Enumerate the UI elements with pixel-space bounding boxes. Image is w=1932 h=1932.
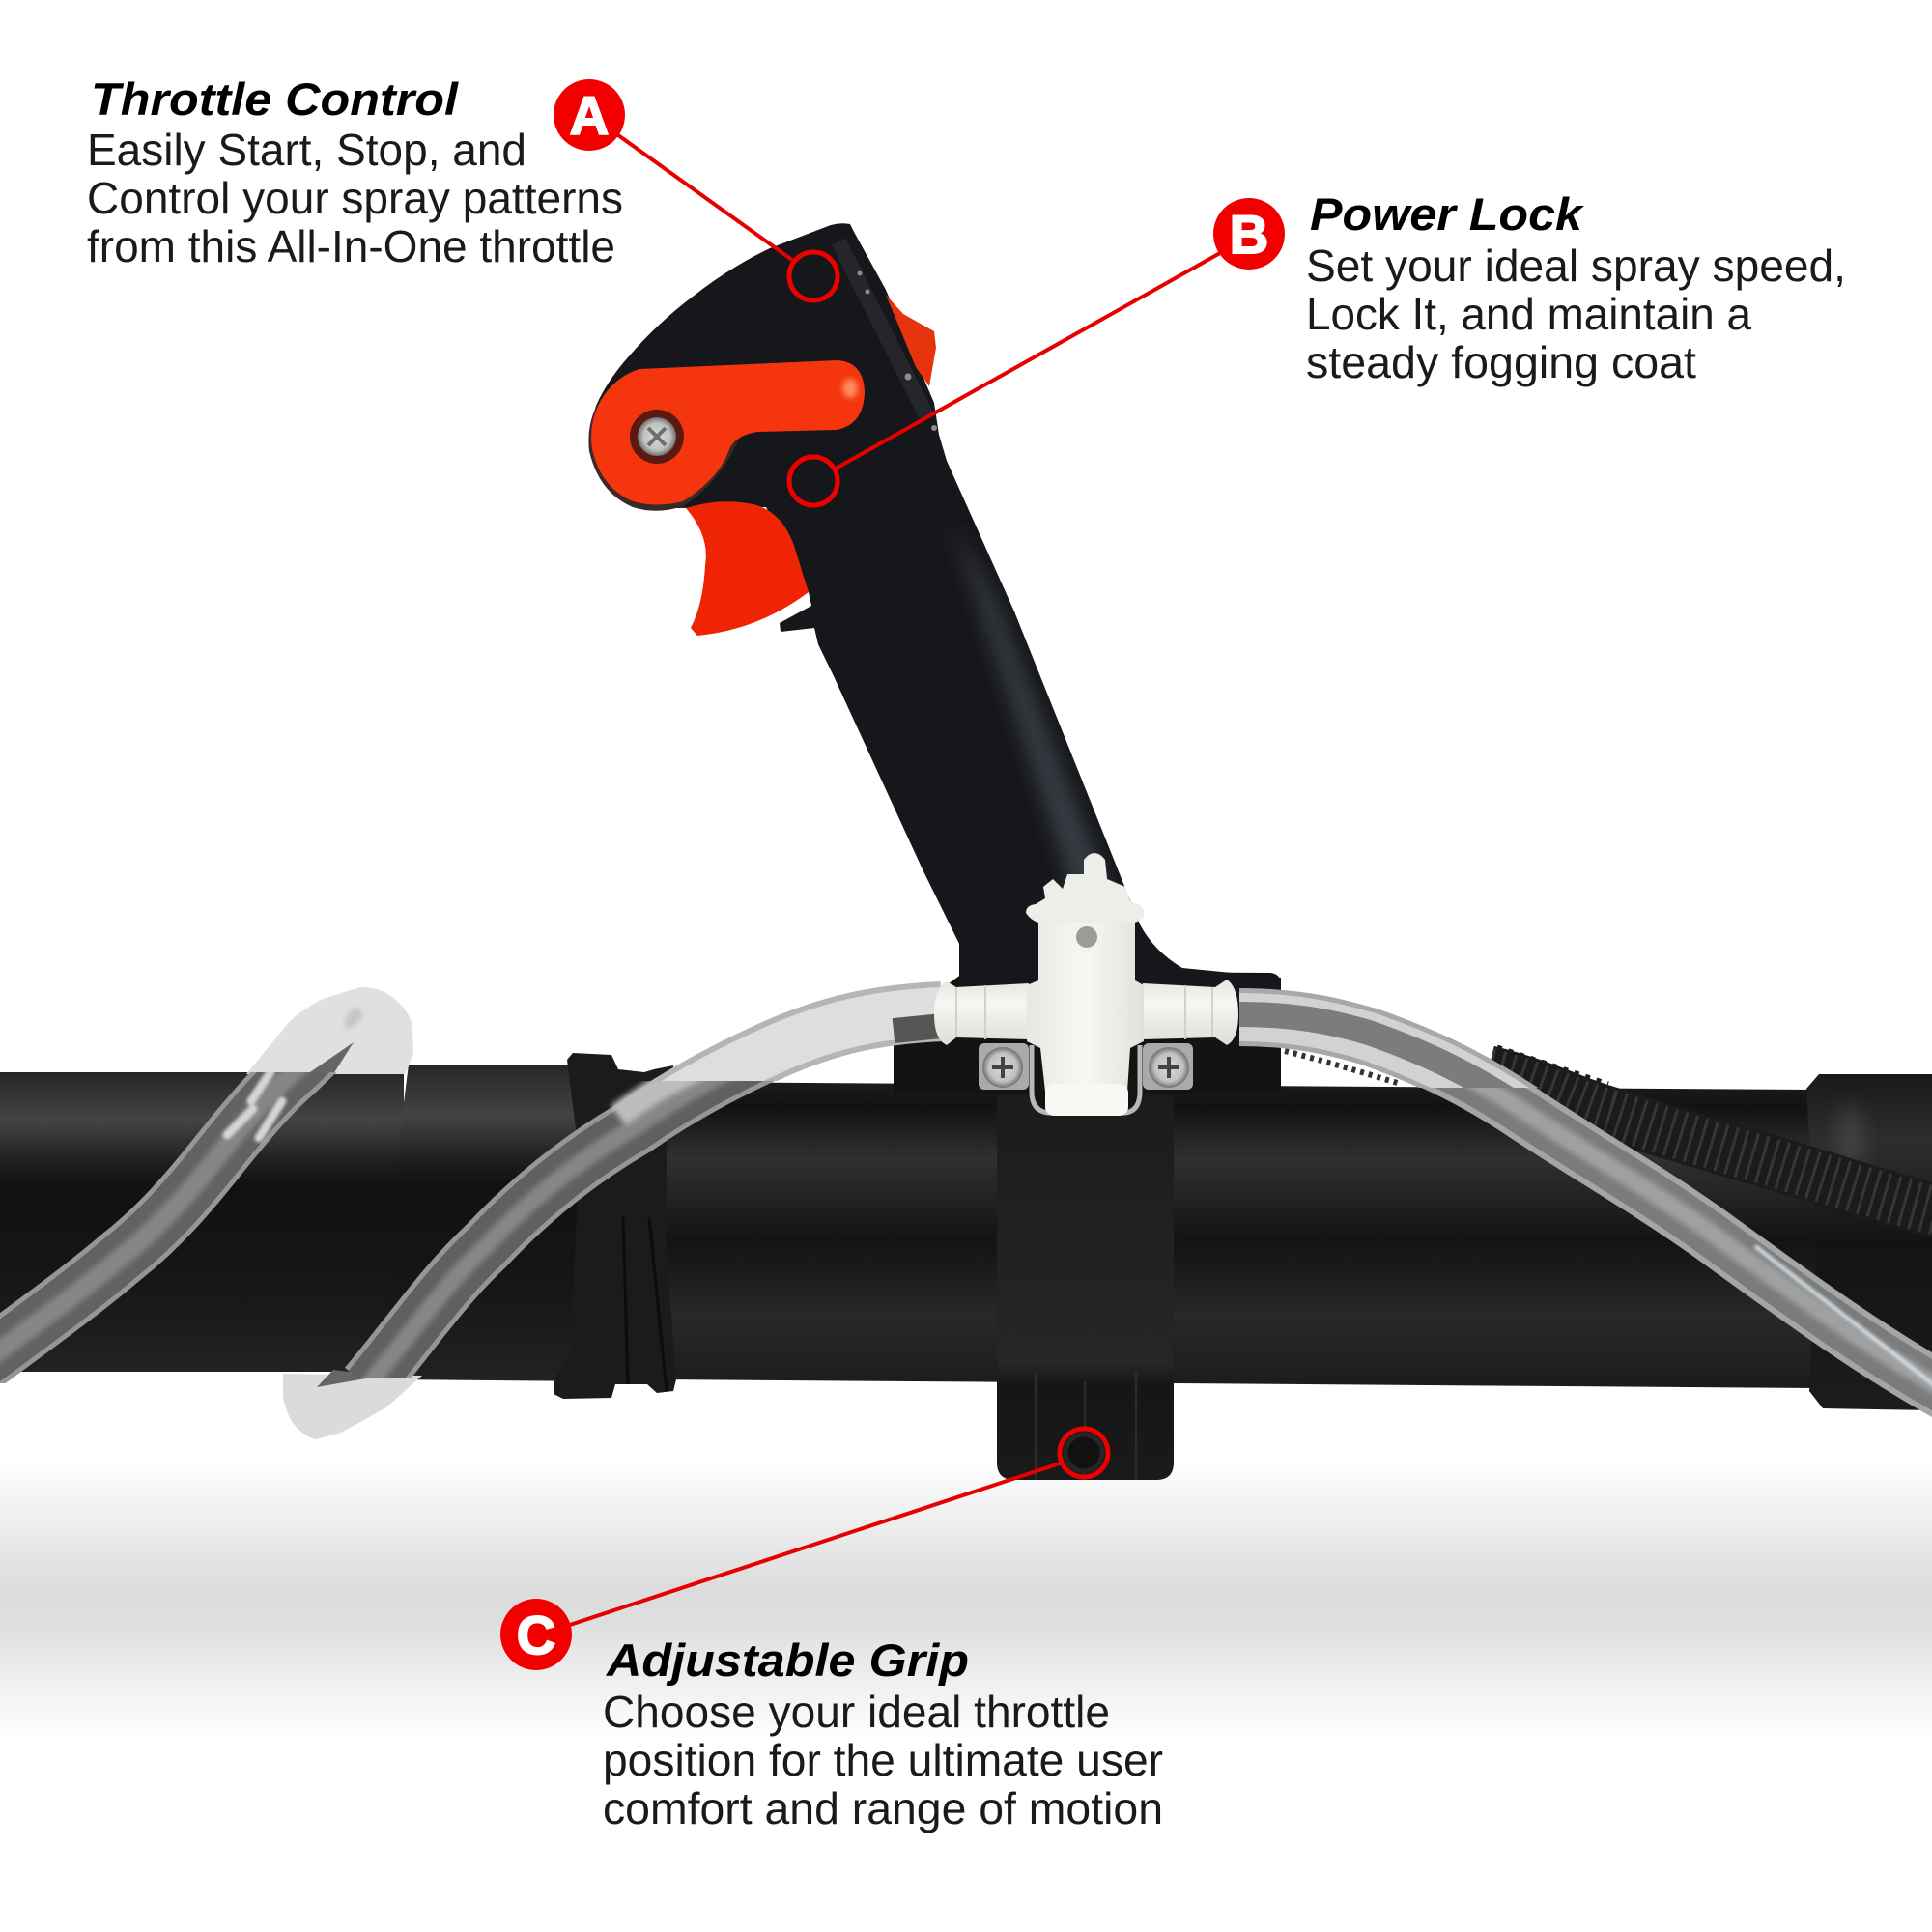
clear tube left (0, 1038, 328, 1372)
rear orange trigger (886, 295, 936, 386)
target ring B (789, 457, 838, 505)
callout A (554, 79, 838, 300)
tube bright streak (1755, 1246, 1932, 1391)
spring teeth upper (1497, 1047, 1608, 1084)
target ring A (789, 252, 838, 300)
mounting plate right (1143, 1043, 1193, 1090)
throttle handle body (589, 223, 1281, 1024)
description: adjustable grip (603, 1687, 1163, 1833)
loop dark wedge (317, 1370, 382, 1387)
text block: adjustable grip (603, 1634, 1163, 1833)
leader line C (570, 1463, 1060, 1625)
floor shadow band (0, 1459, 1932, 1739)
description: adjustable grip: position for the ultimate user (603, 1735, 1163, 1785)
text block: throttle control (87, 73, 623, 271)
leader line B (836, 253, 1220, 469)
lever screw recess (630, 410, 684, 464)
mounting plate left (979, 1043, 1029, 1090)
screw left (982, 1047, 1023, 1088)
lower orange trigger (686, 501, 809, 636)
tube end wedge (307, 1042, 354, 1074)
spring teeth lower (1285, 1051, 1401, 1084)
description: throttle control: from this All-In-One throttle (87, 221, 615, 271)
heading: throttle control: Throttle Control (91, 73, 459, 125)
badge C (500, 1599, 572, 1670)
screw slot (648, 428, 666, 445)
tube loop top (246, 987, 413, 1074)
text block: power lock (1306, 188, 1846, 387)
leader line A (618, 135, 792, 260)
lever rim shadow (588, 362, 838, 511)
collar highlight (1836, 1105, 1863, 1175)
tube right over white (1239, 1017, 1529, 1117)
pipe middle section (657, 1082, 1816, 1388)
valve top screw (1074, 924, 1099, 950)
description: power lock: Lock It, and maintain a (1306, 289, 1751, 339)
metal strap (1032, 1045, 1140, 1113)
grip highlight (959, 547, 1115, 885)
handle bracket and clamp (894, 971, 1281, 1480)
clear tube right (1239, 1014, 1932, 1396)
target ring C (1060, 1429, 1108, 1477)
callout C (500, 1429, 1108, 1670)
badge A (554, 79, 625, 151)
clamp band and lug (997, 1092, 1174, 1480)
valve body (1027, 918, 1144, 1092)
badge C: C (517, 1605, 555, 1665)
valve side arm left (934, 981, 1029, 1045)
valve top flange and knob (1026, 853, 1144, 923)
badge B (1213, 198, 1285, 270)
spring cable (1285, 1047, 1932, 1212)
loop inner shade (344, 1007, 362, 1029)
screw left slot (992, 1057, 1013, 1078)
callout B (789, 198, 1285, 505)
heading: adjustable grip: Adjustable Grip (606, 1634, 969, 1686)
heading: power lock: Power Lock (1310, 188, 1585, 240)
description: adjustable grip: Choose your ideal throttle (603, 1687, 1110, 1737)
pipe left section (0, 1072, 404, 1372)
lug ribs (1036, 1372, 1136, 1480)
description: throttle control (87, 125, 623, 271)
lever screw (638, 417, 676, 456)
screw right (1149, 1047, 1189, 1088)
tube center over white (651, 981, 942, 1081)
arm ribs (956, 985, 1212, 1039)
badge A: A (570, 85, 609, 146)
T valve fitting (934, 853, 1238, 1116)
upper bracket (894, 971, 1281, 1094)
right collar (1806, 1074, 1932, 1410)
tube highlights (227, 1072, 282, 1138)
description: adjustable grip: comfort and range of motion (603, 1783, 1163, 1833)
clear tube center (367, 1011, 942, 1386)
valve foot (1045, 1084, 1128, 1116)
spine dots (858, 270, 937, 431)
lug hole (1065, 1435, 1102, 1471)
badge B: B (1230, 204, 1268, 265)
description: throttle control: Control your spray patterns (87, 173, 623, 223)
pipe collar band (554, 1053, 676, 1399)
blower pipe (0, 1053, 1932, 1410)
tube loop bottom (283, 1370, 422, 1439)
valve side arm right (1143, 980, 1238, 1045)
description: power lock (1306, 241, 1846, 387)
description: power lock: Set your ideal spray speed, (1306, 241, 1846, 291)
pipe step section (388, 1065, 599, 1381)
orange throttle lever (588, 360, 865, 511)
collar seam lines (623, 1217, 667, 1391)
handle spine ridge (838, 242, 927, 417)
description: throttle control: Easily Start, Stop, and (87, 125, 526, 175)
screw right slot (1158, 1057, 1179, 1078)
description: power lock: steady fogging coat (1306, 337, 1696, 387)
lever highlight (842, 379, 858, 398)
